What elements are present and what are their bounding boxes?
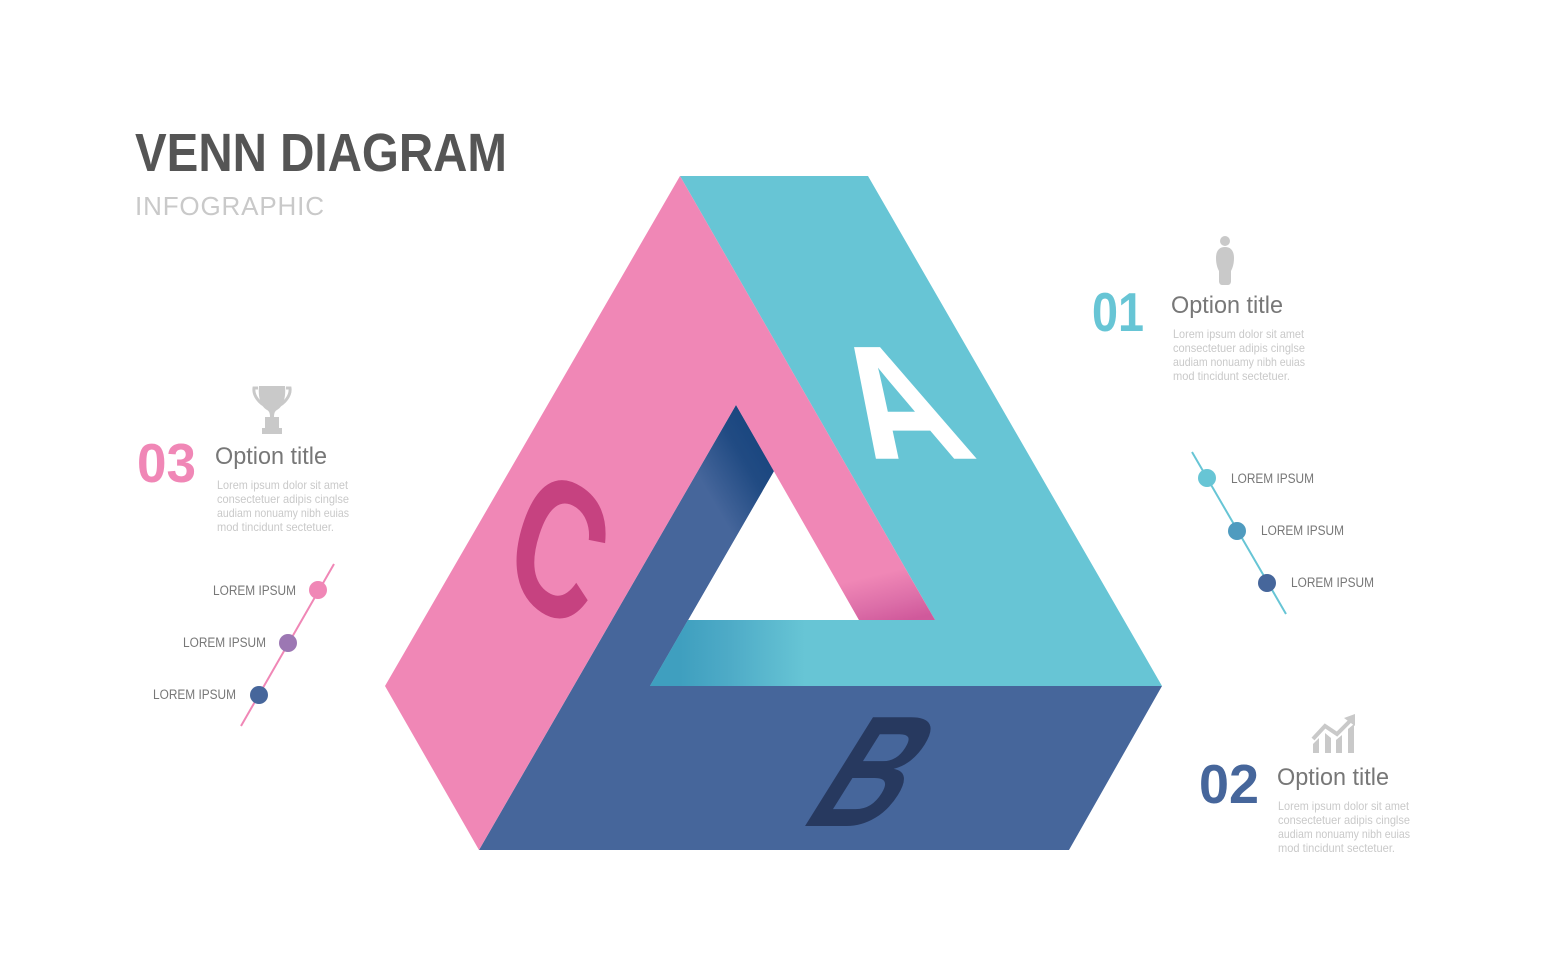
- body text: audiam nonuamy nibh euias: [217, 506, 349, 520]
- icon: trophy: [254, 386, 290, 434]
- subtitle: INFOGRAPHIC: [135, 191, 324, 221]
- labels: LOREM IPSUM: [213, 583, 296, 598]
- labels: LOREM IPSUM: [183, 635, 266, 650]
- icon: growth chart: [1313, 714, 1355, 753]
- marker 3: [250, 686, 268, 704]
- body text: [217, 478, 349, 534]
- icon: person: [1216, 236, 1234, 285]
- body text: [1173, 327, 1305, 383]
- option title: Option title: [215, 443, 327, 470]
- segment A: teal band: [650, 176, 1162, 686]
- labels: [1231, 471, 1374, 590]
- labels: [153, 583, 296, 702]
- body text: consectetuer adipis cinglse: [217, 492, 349, 506]
- labels: LOREM IPSUM: [1261, 523, 1344, 538]
- letter B: B: [776, 683, 973, 860]
- letter A: A: [796, 314, 997, 492]
- panel: option 03: [137, 386, 349, 534]
- body text: consectetuer adipis cinglse: [1173, 341, 1305, 355]
- marker 1: [309, 581, 327, 599]
- body text: mod tincidunt sectetuer.: [1278, 841, 1395, 855]
- body text: audiam nonuamy nibh euias: [1278, 827, 1410, 841]
- marker 2: [1228, 522, 1246, 540]
- body text: mod tincidunt sectetuer.: [1173, 369, 1290, 383]
- labels: LOREM IPSUM: [1231, 471, 1314, 486]
- panel: right timeline list: [1192, 452, 1374, 614]
- impossible triangle diagram: [385, 176, 1162, 860]
- panel: option 02: [1199, 714, 1410, 855]
- letter C: C: [486, 423, 632, 673]
- body text: mod tincidunt sectetuer.: [217, 520, 334, 534]
- body text: Lorem ipsum dolor sit amet: [217, 478, 349, 492]
- number 01: 01: [1092, 281, 1144, 343]
- body text: [1278, 799, 1410, 855]
- number 02: 02: [1199, 753, 1259, 815]
- labels: LOREM IPSUM: [153, 687, 236, 702]
- marker 1: [1198, 469, 1216, 487]
- segment C: pink band: [385, 176, 935, 850]
- panel: left timeline list: [153, 564, 334, 726]
- title: VENN DIAGRAM: [135, 123, 507, 183]
- segment B: blue band: [479, 405, 1162, 850]
- option title: Option title: [1277, 764, 1389, 791]
- marker 2: [279, 634, 297, 652]
- panel: option 01: [1092, 236, 1305, 383]
- body text: Lorem ipsum dolor sit amet: [1278, 799, 1410, 813]
- option title: Option title: [1171, 292, 1283, 319]
- number 03: 03: [137, 432, 196, 494]
- body text: Lorem ipsum dolor sit amet: [1173, 327, 1305, 341]
- labels: LOREM IPSUM: [1291, 575, 1374, 590]
- marker 3: [1258, 574, 1276, 592]
- body text: consectetuer adipis cinglse: [1278, 813, 1410, 827]
- body text: audiam nonuamy nibh euias: [1173, 355, 1305, 369]
